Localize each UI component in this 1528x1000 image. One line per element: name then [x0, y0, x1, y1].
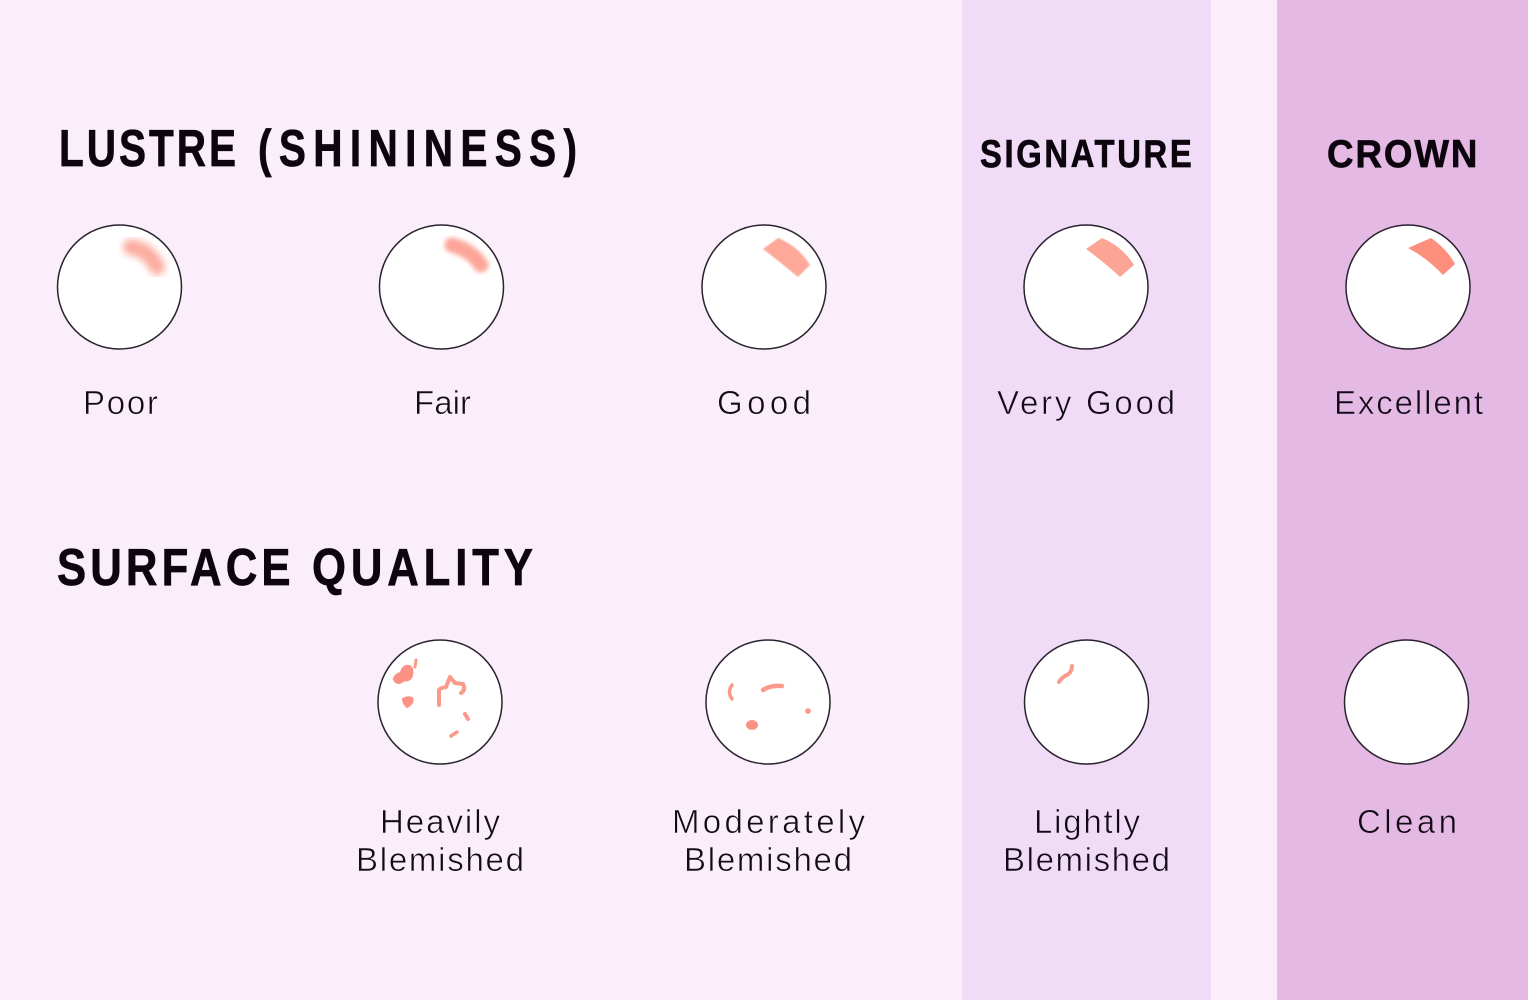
heading: surface quality: SURFACE: [57, 540, 291, 597]
label: heavily blemished: Heavily: [380, 803, 500, 840]
heading: crown: CROWN: [1327, 133, 1477, 176]
panel: crown column: [1277, 0, 1528, 1000]
label: excellent: Excellent: [1334, 384, 1483, 421]
lustre pearl: good: [702, 225, 826, 349]
lustre pearl: excellent: [1346, 225, 1470, 349]
label: moderately blemished: Moderately: [672, 803, 866, 840]
heading: lustre: [59, 119, 577, 177]
heading: surface quality: [57, 540, 533, 597]
heading: signature: SIGNATURE: [980, 131, 1192, 176]
label: moderately blemished: [672, 803, 866, 878]
surface pearl: heavily blemished: [378, 640, 502, 764]
label: very good: Very Good: [997, 384, 1175, 421]
label: heavily blemished: Blemished: [356, 841, 524, 878]
lustre pearl: very good: [1024, 225, 1148, 349]
surface pearl: clean: [1344, 640, 1468, 764]
heading: lustre: LUSTRE: [59, 119, 236, 177]
label: lightly blemished: Blemished: [1003, 841, 1170, 878]
label: lightly blemished: [1003, 803, 1170, 878]
lustre pearl: fair: [380, 225, 504, 349]
label: fair: Fair: [414, 384, 471, 421]
label: moderately blemished: Blemished: [684, 841, 852, 878]
lustre pearl: poor: [58, 225, 182, 349]
label: heavily blemished: [356, 803, 524, 878]
heading: surface quality: QUALITY: [312, 540, 533, 597]
label: good: Good: [717, 384, 811, 421]
panel: signature column: [962, 0, 1211, 1000]
surface pearl: lightly blemished: [1024, 640, 1148, 764]
label: clean: Clean: [1357, 803, 1457, 840]
label: lightly blemished: Lightly: [1034, 803, 1140, 840]
heading: lustre: (SHININESS): [258, 119, 577, 177]
surface pearl: moderately blemished: [706, 640, 830, 764]
label: poor: Poor: [83, 384, 158, 421]
